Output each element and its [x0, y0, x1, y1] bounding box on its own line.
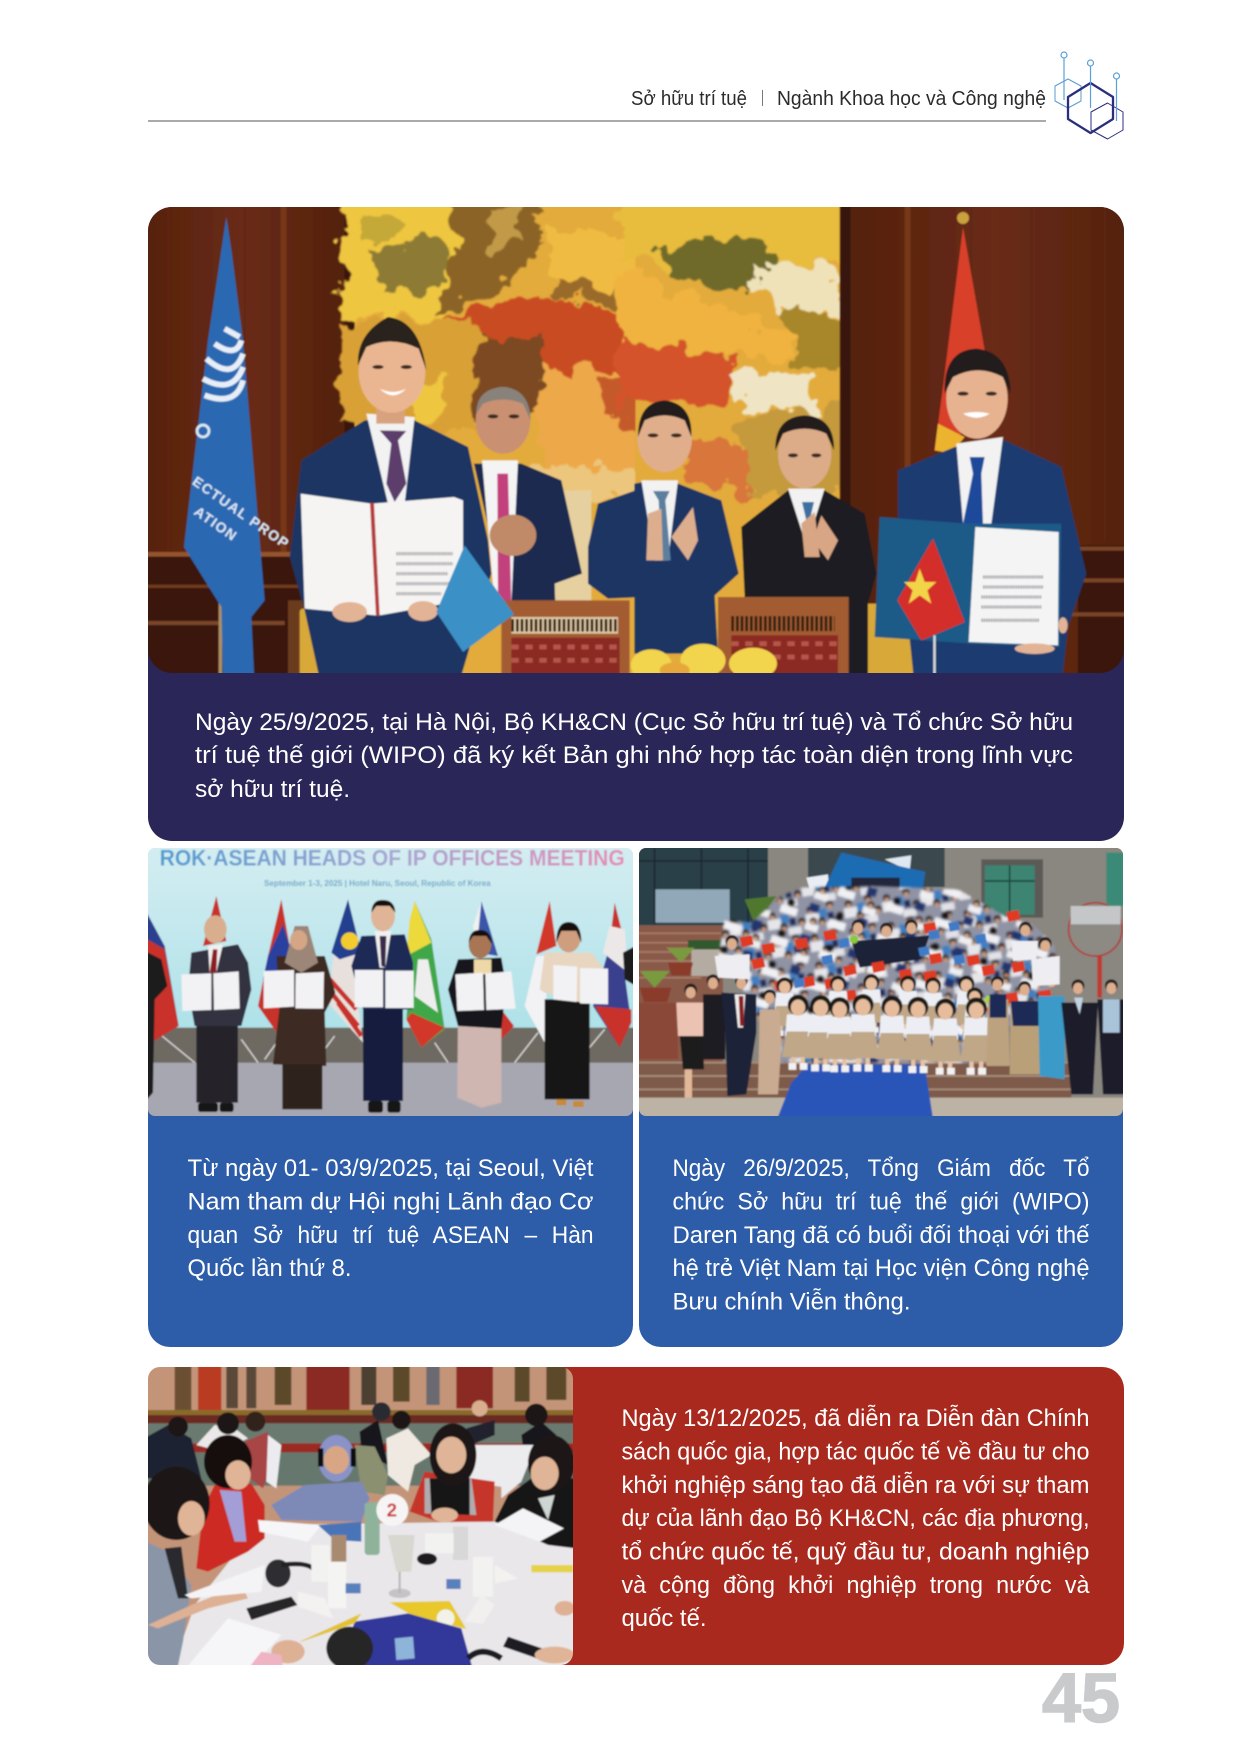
chair	[717, 596, 850, 673]
delegate 5	[540, 922, 608, 1107]
staff and guests	[676, 922, 1131, 1098]
caption: startup investment forum	[622, 1405, 1090, 1632]
delegate 1	[181, 915, 251, 1112]
caption: ROK-ASEAN meeting: Từ ngày 01- 03/9/2025, tại Seoul, Việt	[188, 1155, 594, 1182]
blue booklet	[436, 545, 514, 652]
person: Vietnamese official with folder	[875, 349, 1086, 687]
caption: WIPO youth dialogue: chức Sở hữu trí tuệ thế giới (WIPO)	[672, 1188, 1090, 1216]
person: second official	[474, 387, 582, 604]
hall wall	[138, 1355, 588, 1486]
person: third official's arm	[587, 490, 636, 600]
participant: hijab	[271, 1435, 370, 1522]
icon: hexagon network logo	[1055, 52, 1123, 139]
caption: WIPO youth dialogue	[672, 1155, 1090, 1316]
caption: startup investment forum: tổ chức quốc tế, quỹ đầu tư, doanh nghiệp	[622, 1538, 1090, 1566]
table	[168, 1522, 588, 1682]
caption: ROK-ASEAN meeting: Quốc lần thứ 8.	[188, 1255, 352, 1282]
blue carpet	[778, 1064, 934, 1116]
left stairs and planters	[628, 896, 776, 1065]
front row students	[782, 994, 993, 1075]
caption: WIPO memorandum: trí tuệ thế giới (WIPO) đã ký kết Bản ghi nhớ hợp tác toàn diện trong lĩnh vực	[195, 742, 1073, 769]
table number sign	[376, 1494, 408, 1526]
middle row students	[774, 973, 986, 1038]
waving flags	[740, 910, 1052, 1026]
person: fourth official	[741, 415, 876, 687]
panel: startup investment forum	[138, 1355, 1124, 1682]
chapter title: Ngành Khoa học và Công nghệ	[777, 88, 1046, 110]
caption: startup investment forum: và cộng đồng khởi nghiệp trong nước và	[622, 1572, 1090, 1599]
participant: red jacket	[196, 1435, 265, 1572]
photo: delegates holding documents	[148, 848, 633, 1116]
flag: WIPO	[184, 217, 293, 687]
caption: WIPO youth dialogue: Bưu chính Viễn thông.	[672, 1288, 910, 1316]
caption: WIPO memorandum: sở hữu trí tuệ.	[195, 776, 350, 803]
crowd of students	[718, 886, 1058, 1063]
page canvas	[148, 51, 1124, 1724]
photo: signing ceremony with five officials	[148, 207, 1124, 673]
documents and props	[175, 1494, 575, 1682]
banner title: ROK·ASEAN HEADS OF IP OFFICES MEETING	[160, 845, 625, 870]
flag: WIPO: ECTUAL PROP	[190, 473, 293, 552]
header	[148, 52, 1123, 139]
caption: WIPO youth dialogue: hệ trẻ Việt Nam tại Học viện Công nghệ	[672, 1255, 1090, 1282]
delegate 4	[448, 930, 516, 1108]
panel: ROK-ASEAN meeting	[138, 836, 645, 1347]
caption: startup investment forum: quốc tế.	[622, 1605, 706, 1632]
table number sign: 2	[387, 1500, 397, 1521]
mirror	[1069, 903, 1122, 998]
signed document	[875, 517, 971, 644]
flag: Vietnam large	[935, 227, 985, 450]
participant: black blazer	[495, 1435, 588, 1550]
delegate 2	[264, 926, 335, 1109]
caption: ROK-ASEAN meeting: quan Sở hữu trí tuệ ASEAN – Hàn	[188, 1222, 594, 1249]
caption: startup investment forum: sách quốc gia, hợp tác quốc tế về đầu tư cho	[622, 1438, 1090, 1466]
background guests	[138, 1400, 556, 1498]
caption: ROK-ASEAN meeting: Nam tham dự Hội nghị Lãnh đạo Cơ	[188, 1188, 594, 1216]
chair	[500, 599, 630, 673]
delegate 3	[351, 900, 414, 1113]
caption: WIPO memorandum: Ngày 25/9/2025, tại Hà Nội, Bộ KH&CN (Cục Sở hữu trí tuệ) và Tổ chức Sở hữu	[195, 709, 1073, 736]
panel: WIPO youth dialogue	[628, 836, 1135, 1347]
signed document	[301, 494, 463, 616]
flag: WIPO: ATION	[191, 503, 241, 544]
page number: 45	[1042, 1659, 1120, 1737]
flags	[141, 896, 631, 1048]
person: minister	[635, 400, 739, 654]
panel: WIPO memorandum signing	[128, 187, 1151, 841]
flag: Vietnam table flag	[933, 635, 936, 687]
participant: foreground left	[138, 1467, 248, 1682]
participant: red and grey vest	[410, 1423, 495, 1522]
person: WIPO director general	[290, 317, 514, 687]
stage banner	[806, 852, 926, 890]
photo: round-table discussion	[138, 1355, 588, 1682]
caption: WIPO memorandum	[195, 709, 1073, 803]
tote bag	[390, 1601, 466, 1629]
caption: ROK-ASEAN meeting	[188, 1155, 594, 1282]
dignitaries at centre of crowd	[851, 919, 930, 968]
caption: startup investment forum: Ngày 13/12/2025, đã diễn ra Diễn đàn Chính	[622, 1405, 1090, 1432]
photo: group photo on stairs	[639, 848, 1123, 1116]
caption: WIPO youth dialogue: Ngày 26/9/2025, Tổng Giám đốc Tổ	[672, 1155, 1090, 1182]
flowers	[630, 642, 778, 673]
banner subtitle: September 1-3, 2025 | Hotel Naru, Seoul, Republic of Korea	[264, 879, 491, 888]
caption: startup investment forum: khởi nghiệp sáng tạo đã diễn ra với sự tham	[622, 1472, 1090, 1499]
caption: startup investment forum: dự của lãnh đạo Bộ KH&CN, các địa phương,	[622, 1505, 1090, 1532]
section title: Sở hữu trí tuệ	[631, 88, 747, 110]
caption: WIPO youth dialogue: Daren Tang đã có buổi đối thoại với thế	[672, 1222, 1090, 1249]
delegate far left edge	[148, 952, 168, 1100]
